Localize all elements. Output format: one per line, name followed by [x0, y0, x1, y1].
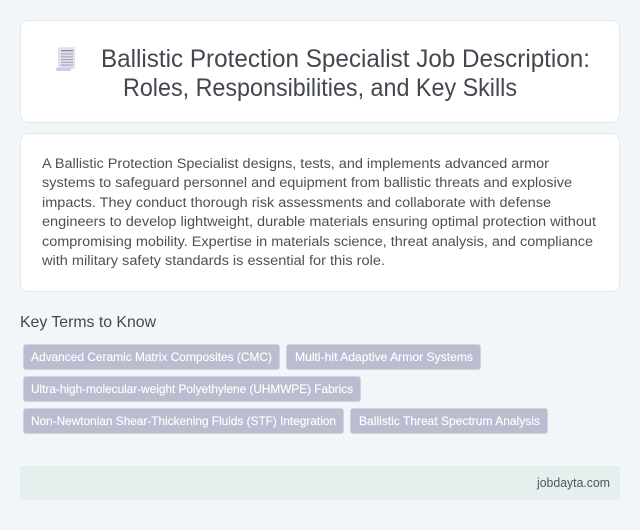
chip: CMC: Advanced Ceramic Matrix Composites (CMC)	[31, 350, 272, 364]
footer	[20, 466, 620, 500]
title	[101, 45, 590, 102]
chip: UHMWPE	[24, 376, 360, 402]
title: Roles, Responsibilities, and Key Skills	[123, 74, 517, 102]
icon: document	[56, 47, 75, 71]
panel: key term chips	[24, 344, 548, 434]
panel: title card	[20, 20, 620, 122]
text block: job description: impacts. They conduct thorough risk assessments and collaborate with defense	[42, 195, 551, 211]
chip: STF: Non-Newtonian Shear-Thickening Fluids (STF) Integration	[31, 414, 336, 428]
text block: job description: engineers to develop lightweight, durable materials ensuring optimal protection without	[42, 214, 596, 230]
text block: job description: A Ballistic Protection Specialist designs, tests, and implements advanced armor	[42, 156, 549, 172]
chip: UHMWPE: Ultra-high-molecular-weight Polyethylene (UHMWPE) Fabrics	[31, 382, 353, 396]
text block: job description: compromising mobility. Expertise in materials science, threat analysis, and compliance	[42, 234, 593, 250]
chip: threat analysis	[350, 408, 548, 434]
chip: threat analysis: Ballistic Threat Spectrum Analysis	[359, 414, 540, 428]
panel: description card	[20, 134, 620, 292]
chip: STF	[24, 408, 344, 434]
heading: key terms: Key Terms to Know	[20, 314, 156, 331]
footer: jobdayta.com	[536, 476, 610, 490]
text block: job description: with military safety standards is essential for this role.	[41, 253, 385, 269]
text block: job description	[41, 156, 596, 269]
title: Ballistic Protection Specialist Job Description:	[101, 45, 590, 73]
text block: job description: systems to safeguard personnel and equipment from ballistic threats and explosive	[42, 175, 572, 191]
chip: armor systems	[286, 344, 480, 370]
chip: armor systems: Multi-hit Adaptive Armor Systems	[295, 350, 473, 364]
chip: CMC	[24, 344, 280, 370]
